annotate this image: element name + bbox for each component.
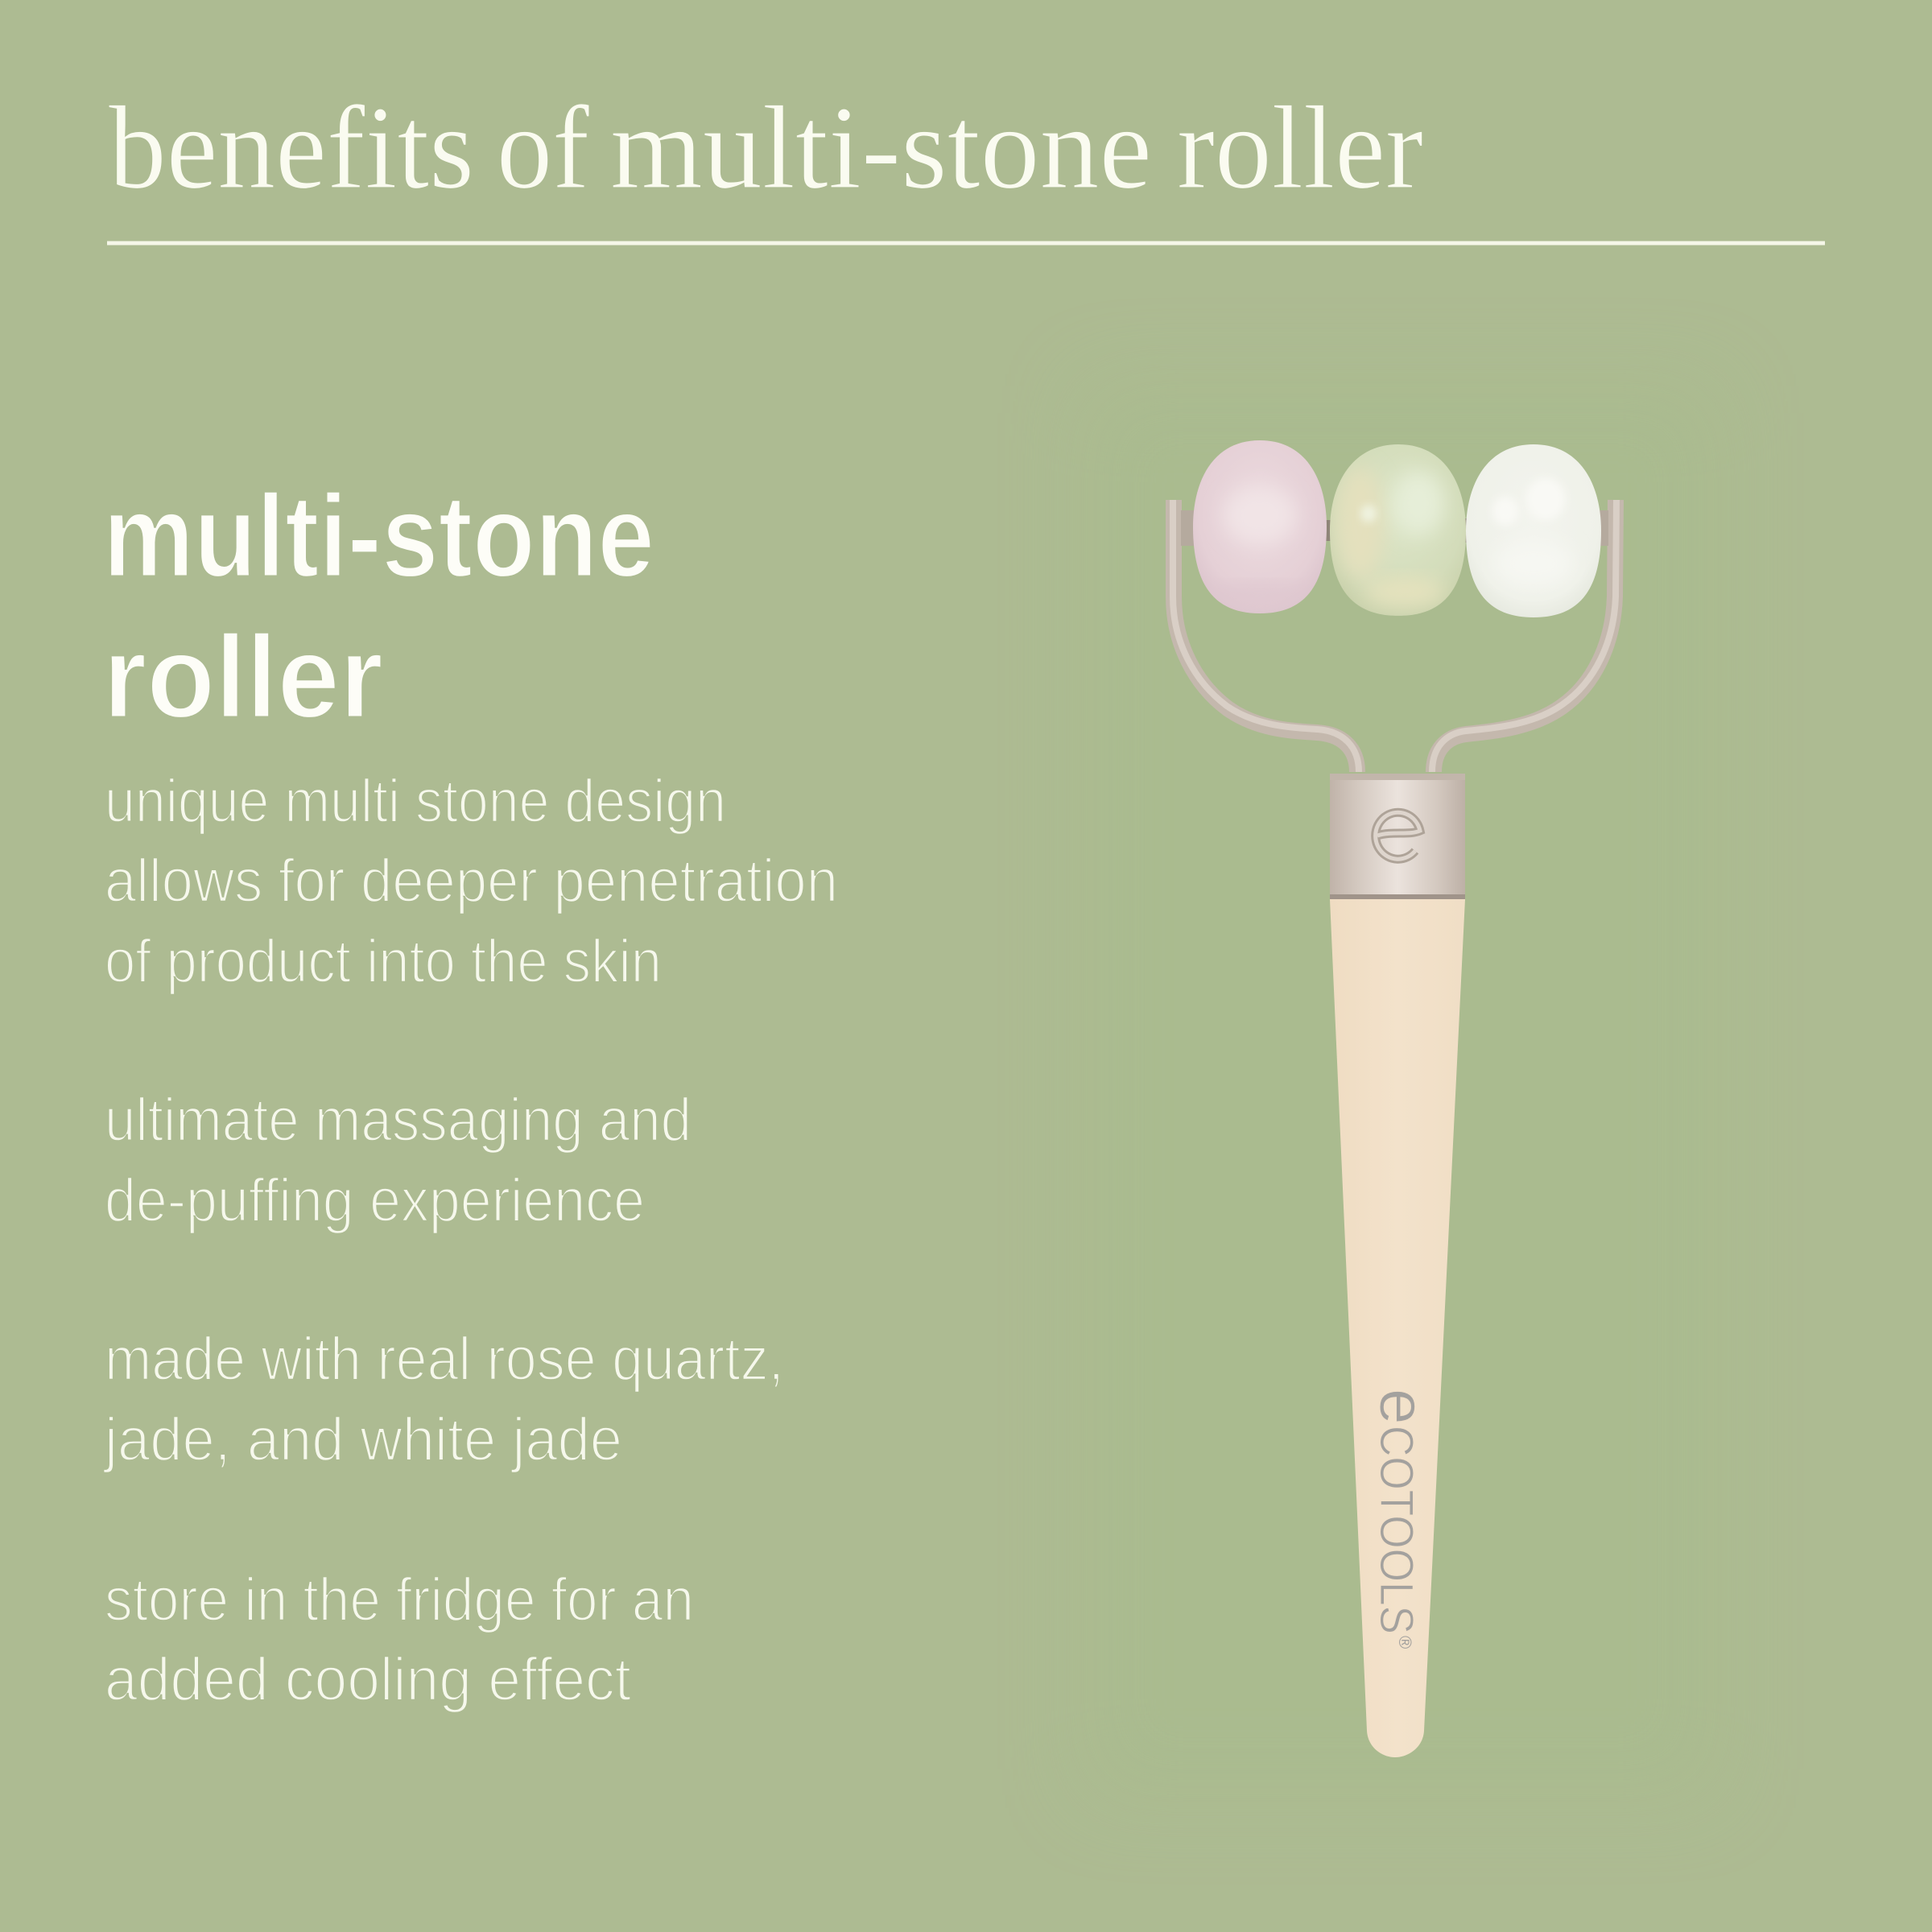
text block: materials	[103, 1325, 784, 1474]
text block: cooling	[105, 1566, 694, 1714]
text block: massaging: de-puffing experience	[105, 1166, 645, 1235]
heading: multi-stone roller	[103, 470, 654, 742]
text block: deeper penetration: unique multi stone design	[105, 767, 726, 836]
icon: axle pins	[1181, 510, 1608, 546]
text block: cooling: added cooling effect	[105, 1645, 631, 1714]
text block: materials: made with real rose quartz,	[105, 1325, 784, 1393]
brand wordmark: e	[1367, 1389, 1439, 1425]
text block: materials: jade, and white jade	[103, 1406, 622, 1474]
heading: multi-stone roller: multi-stone	[103, 470, 654, 601]
text block: deeper penetration	[105, 767, 838, 996]
text block: deeper penetration: of product into the skin	[105, 927, 662, 996]
text block: deeper penetration: allows for deeper penetration	[105, 847, 838, 915]
brand wordmark	[1367, 1389, 1439, 1649]
title: of	[497, 82, 590, 214]
title: roller	[1177, 82, 1423, 214]
text block: massaging: ultimate massaging and	[105, 1086, 691, 1154]
icon: cream handle	[1330, 899, 1465, 1757]
heading: multi-stone roller: roller	[103, 611, 383, 742]
icon: rose quartz stone	[1193, 440, 1327, 613]
icon: metal bracket	[1173, 500, 1616, 772]
product: multi-stone roller	[1173, 440, 1616, 1757]
icon: e logo	[1376, 812, 1420, 859]
title: multi-stone	[610, 82, 1152, 214]
title: benefits	[109, 82, 474, 214]
icon: white jade stone	[1466, 444, 1601, 617]
icon: metal collar	[1330, 774, 1465, 899]
icon: jade stone	[1330, 444, 1466, 616]
title	[109, 82, 1423, 214]
text block: massaging	[105, 1086, 691, 1235]
brand wordmark: COTOOLS	[1370, 1426, 1422, 1634]
brand wordmark: ®	[1395, 1636, 1415, 1649]
text block: cooling: store in the fridge for an	[105, 1566, 694, 1634]
